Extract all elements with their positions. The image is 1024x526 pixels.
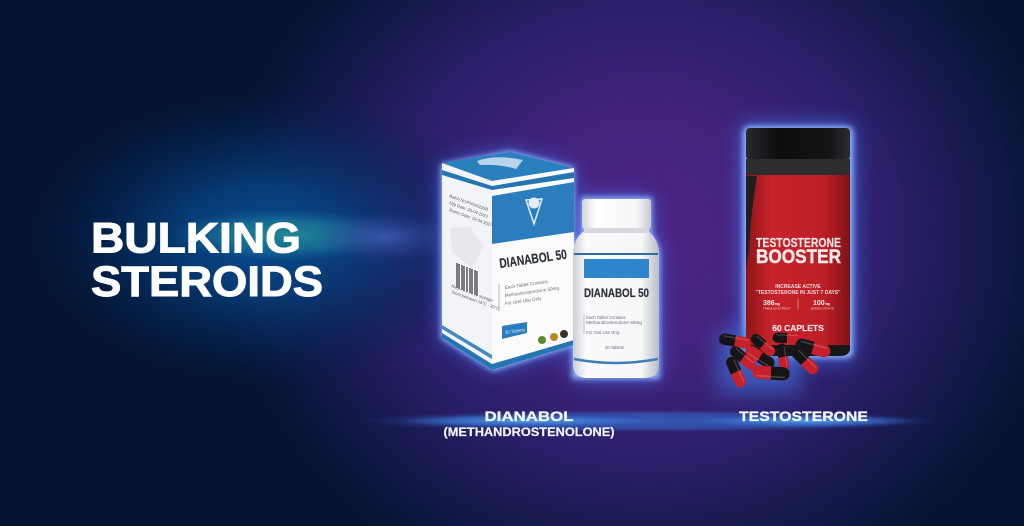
icon: Dianabol box: Store between 15°C - 30°C [451,289,500,311]
icon: bottle body: TESTOSTERONE [756,236,841,250]
icon: barcode [456,262,479,297]
icon: black cap [746,128,850,160]
icon: bottle body [746,159,850,356]
product glow [742,125,854,360]
product glow [442,152,659,378]
icon: bottle body: TRIBULUS EXTRACT [763,306,791,310]
icon: Dianabol box [442,152,574,370]
title: BULKING [91,214,301,262]
icon: Dianabol box: 30 Tablets [504,327,526,335]
icon: Dianabol bottle: Methandrostenolone 50mg [586,320,643,325]
title [91,214,323,306]
label: Dianabol [444,409,615,439]
product: Dianabol box and bottle [442,152,659,378]
icon: Dianabol box: Batch No:PH590235B [449,193,489,212]
icon: bottle body: 100mg [813,300,830,307]
icon: capsules [718,332,832,389]
icon: bottle body: BOOSTER [756,247,841,268]
icon: Dianabol box: For Oral Use Only [504,296,542,306]
icon: Dianabol bottle: 30 Tablets [605,345,624,350]
icon: Dianabol box: Mfg Date: 20-04-2023 [449,200,489,219]
icon: Dianabol bottle: DIANABOL 50 [584,286,649,300]
product: Testosterone booster [718,125,854,392]
icon: bottle body: 386mg [763,300,780,307]
title: STEROIDS [91,258,323,306]
glow band under labels [360,408,940,434]
icon: bottle body: 60 CAPLETS [772,323,824,333]
icon: Dianabol box: DIANABOL 50 [498,247,568,271]
icon: Dianabol bottle [573,199,659,378]
icon: Dianabol box: Methandrostenolone 50mg [504,285,560,298]
icon: Dianabol box: Recommended storage: [451,283,494,303]
icon: Dianabol bottle: Each Tablet Contains [586,315,626,320]
icon: Dianabol bottle: For Oral Use Only [586,330,621,335]
label: Dianabol: (METHANDROSTENOLONE) [444,427,615,439]
icon: bottle body: "TESTOSTERONE IN JUST 7 DAYS" [755,290,841,296]
label: Dianabol: DIANABOL [484,409,574,424]
label: Testosterone: TESTOSTERONE [739,409,868,424]
icon: bottle body: INCREASE ACTIVE [775,284,821,290]
icon: bottle body: BORON CITRATE [811,306,834,310]
icon: Dianabol box: Each Tablet Contains [504,279,549,290]
icon: Dianabol box: Expiry Date: 19-04-2027 [449,207,494,228]
